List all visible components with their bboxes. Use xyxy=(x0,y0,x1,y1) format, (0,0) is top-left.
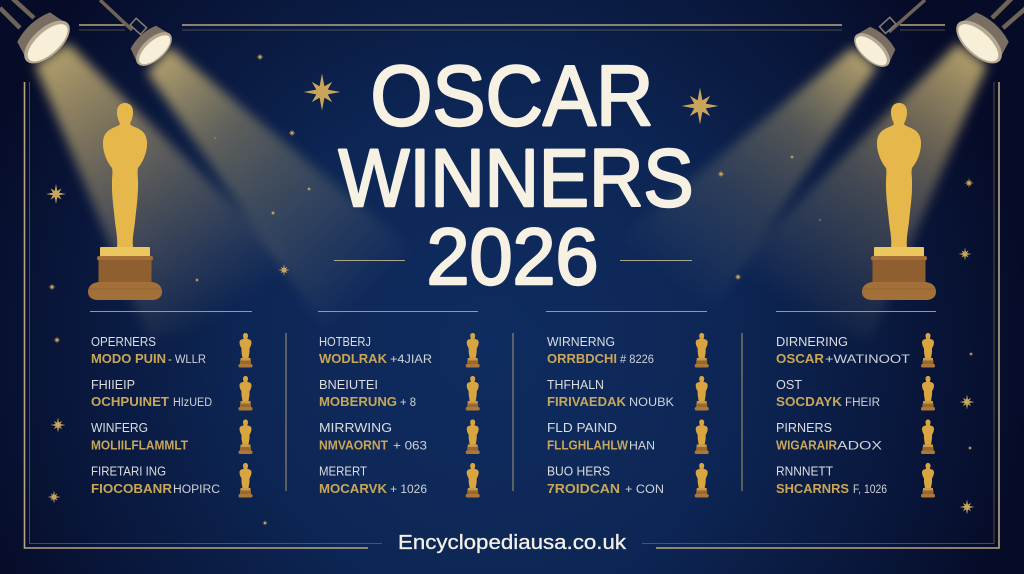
entry 1 xyxy=(547,333,709,368)
entry 3 xyxy=(776,420,935,454)
entry 1: # 8226 xyxy=(620,354,654,366)
entry 2 xyxy=(547,376,709,410)
scattered stars xyxy=(46,53,974,526)
entry 3: NMVAORNT xyxy=(319,438,388,452)
entry 4: BUO HERS xyxy=(547,464,610,478)
title: 2026 xyxy=(426,212,598,301)
entry 1 xyxy=(776,333,935,368)
entry 3: MIRRWING xyxy=(319,421,392,435)
entry 1: +WATINOOT xyxy=(825,354,910,366)
entry 4 xyxy=(547,463,709,498)
entry 2 xyxy=(91,376,252,410)
entry 2: BNEIUTEI xyxy=(319,378,378,392)
entry 3 xyxy=(547,420,709,454)
entry 4: 7ROIDCAN xyxy=(547,481,620,496)
entry 3 xyxy=(319,420,480,454)
title side rules xyxy=(334,260,692,262)
spotlight lamp: top centre-right xyxy=(848,0,925,73)
entry 1: OSCAR xyxy=(776,351,825,366)
entry 1 xyxy=(91,333,252,368)
entry 3: WIGARAIR xyxy=(776,438,838,452)
entry 4: + CON xyxy=(625,484,664,496)
entry 2: SOCDAYK xyxy=(776,394,843,409)
entry 4: RNNNETT xyxy=(776,464,833,478)
entry 4 xyxy=(319,463,480,498)
entry 2 xyxy=(319,376,480,410)
entry 1: +4JIAR xyxy=(390,354,432,366)
panel: winners column 3 xyxy=(547,333,709,498)
entry 4 xyxy=(776,463,935,498)
entry 4: FIRETARI ING xyxy=(91,464,166,478)
entry 3: FLD PAIND xyxy=(547,421,617,435)
entry 2: FHEIR xyxy=(845,397,880,409)
footer website: Encyclopediausa.co.uk xyxy=(398,532,627,554)
entry 2 xyxy=(776,376,935,410)
entry 3: + 063 xyxy=(393,440,427,452)
entry 1: OPERNERS xyxy=(91,335,156,349)
entry 3: WINFERG xyxy=(91,421,148,435)
spotlight beams xyxy=(35,43,987,340)
entry 1: DIRNERING xyxy=(776,335,848,349)
entry 2: FHIIEIP xyxy=(91,378,135,392)
entry 4: + 1026 xyxy=(390,484,427,496)
entry 1: ORRBDCHI xyxy=(547,351,617,366)
panel: winners column 1 xyxy=(91,333,252,498)
entry 1: WODLRAK xyxy=(319,351,388,366)
entry 2: MOBERUNG xyxy=(319,394,397,409)
entry 1: - WLLR xyxy=(168,354,206,366)
title xyxy=(338,49,694,301)
entry 1: WIRNERNG xyxy=(547,335,615,349)
spotlight lamp: top centre-left xyxy=(100,0,178,72)
entry 2: HIzUED xyxy=(173,397,212,409)
entry 3: HAN xyxy=(629,440,655,452)
entry 1: HOTBERJ xyxy=(319,335,371,349)
title: OSCAR xyxy=(370,49,654,144)
entry 4: HOPIRC xyxy=(173,484,220,496)
entry 2: OST xyxy=(776,378,802,392)
panel: winners column 4 xyxy=(776,333,935,498)
entry 2: FIRIVAEDAK xyxy=(547,394,627,409)
entry 3 xyxy=(91,420,252,454)
spotlight lamp: top right xyxy=(949,0,1024,71)
title: WINNERS xyxy=(338,133,694,224)
entry 3: ADOX xyxy=(837,440,882,452)
entry 2: NOUBK xyxy=(629,397,674,409)
entry 3: FLLGHLAHLW xyxy=(547,438,629,452)
entry 1 xyxy=(319,333,480,368)
entry 4: MERERT xyxy=(319,464,367,478)
column top rules and dividers xyxy=(90,312,936,491)
left Oscar statue xyxy=(88,103,162,300)
entry 4: FIOCOBANR xyxy=(91,481,173,496)
entry 4: SHCARNRS xyxy=(776,481,849,496)
entry 2: THFHALN xyxy=(547,378,604,392)
entry 4 xyxy=(91,463,252,498)
right Oscar statue xyxy=(862,103,936,300)
entry 2: + 8 xyxy=(400,397,416,409)
entry 3: PIRNERS xyxy=(776,421,832,435)
entry 3: MOLIILFLAMMLT xyxy=(91,438,188,452)
entry 1: MODO PUIN xyxy=(91,351,166,366)
entry 2: OCHPUINET xyxy=(91,394,169,409)
entry 4: MOCARVK xyxy=(319,481,388,496)
panel: winners column 2 xyxy=(319,333,480,498)
entry 4: F, 1026 xyxy=(853,484,887,496)
spotlight lamp: top left xyxy=(0,0,77,71)
